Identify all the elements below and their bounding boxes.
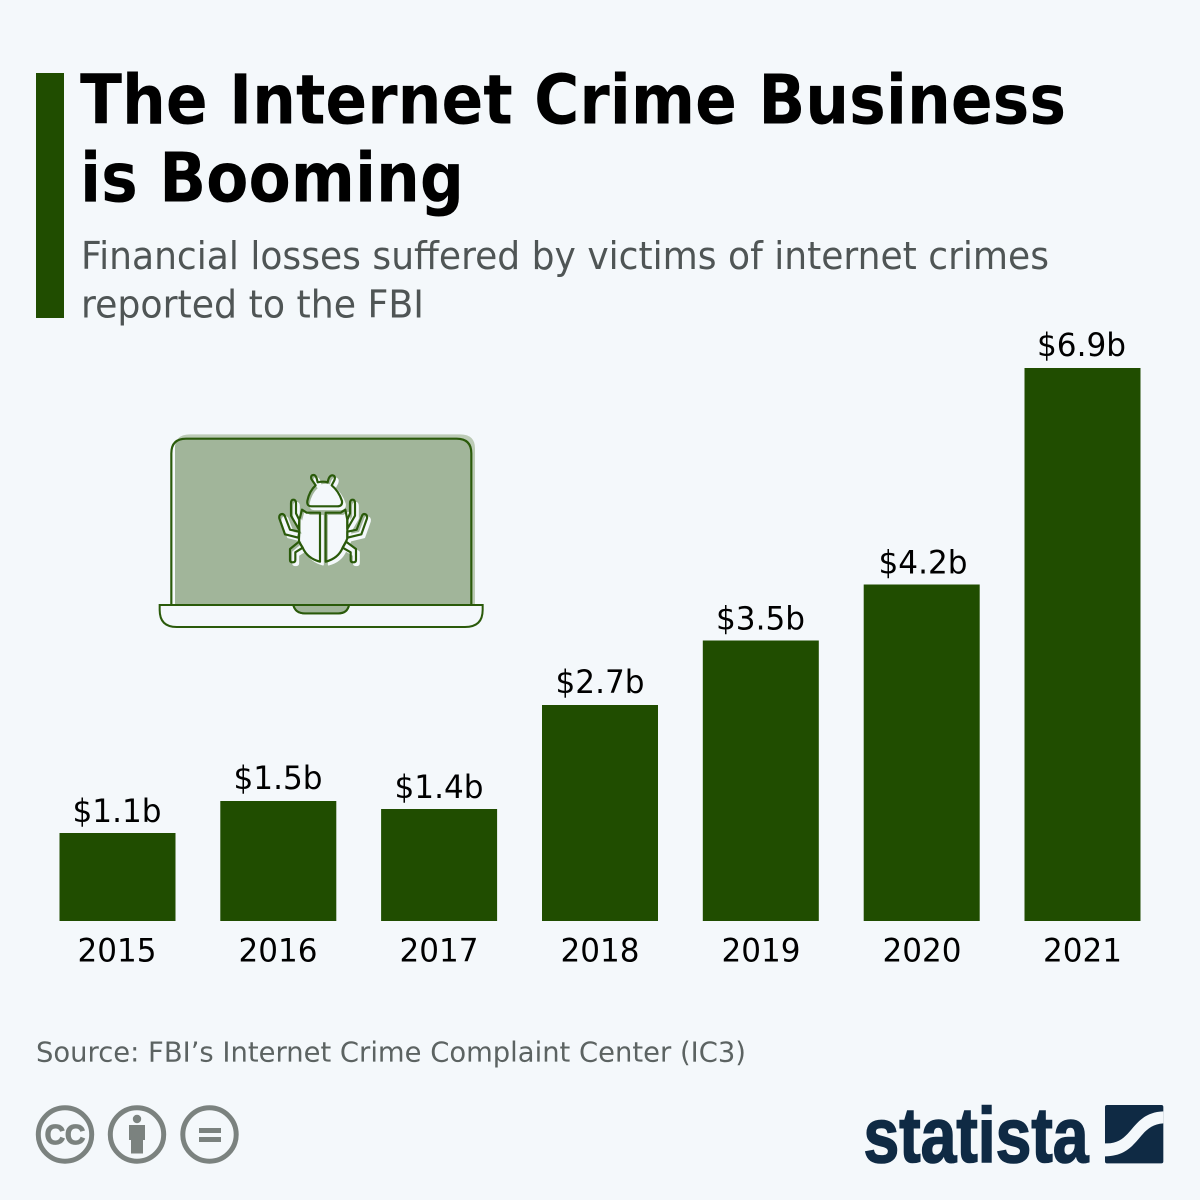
year axis labels: 2015 — [78, 932, 156, 970]
year axis labels — [78, 932, 1122, 970]
year axis labels: 2020 — [882, 932, 962, 970]
source: Source: FBI’s Internet Crime Complaint Center (IC3) — [36, 1036, 746, 1068]
value labels: $2.7b — [556, 663, 644, 701]
logo wordmark: statista — [864, 1091, 1089, 1179]
icon: no derivatives — [183, 1108, 236, 1161]
logo mark — [1105, 1105, 1163, 1163]
subtitle: Financial losses suffered by victims of internet crimes — [81, 234, 1049, 278]
statista logo — [864, 1091, 1163, 1179]
year axis labels: 2017 — [400, 932, 478, 970]
year axis labels: 2016 — [238, 932, 318, 970]
value labels — [72, 326, 1126, 830]
icon: attribution — [110, 1108, 164, 1161]
bar chart — [60, 326, 1140, 970]
value labels: $6.9b — [1037, 326, 1126, 364]
icon: cc — [38, 1108, 92, 1161]
icon: creative commons licence — [38, 1108, 236, 1161]
icon: laptop with bug — [160, 434, 483, 627]
subtitle: reported to the FBI — [81, 282, 424, 326]
value labels: $1.4b — [394, 768, 484, 806]
year axis labels: 2019 — [722, 932, 800, 970]
value labels: $4.2b — [878, 544, 968, 582]
value labels: $1.1b — [72, 792, 162, 830]
title — [80, 60, 1066, 218]
year axis labels: 2021 — [1043, 932, 1122, 970]
icon: cc: CC — [45, 1119, 85, 1150]
title accent bar — [36, 73, 64, 318]
bars — [60, 368, 1140, 921]
icon: bug — [279, 475, 370, 565]
title: is Booming — [80, 138, 464, 218]
subtitle — [81, 234, 1049, 326]
title: The Internet Crime Business — [80, 60, 1066, 140]
year axis labels: 2018 — [560, 932, 640, 970]
value labels: $1.5b — [234, 759, 322, 797]
value labels: $3.5b — [716, 600, 805, 638]
